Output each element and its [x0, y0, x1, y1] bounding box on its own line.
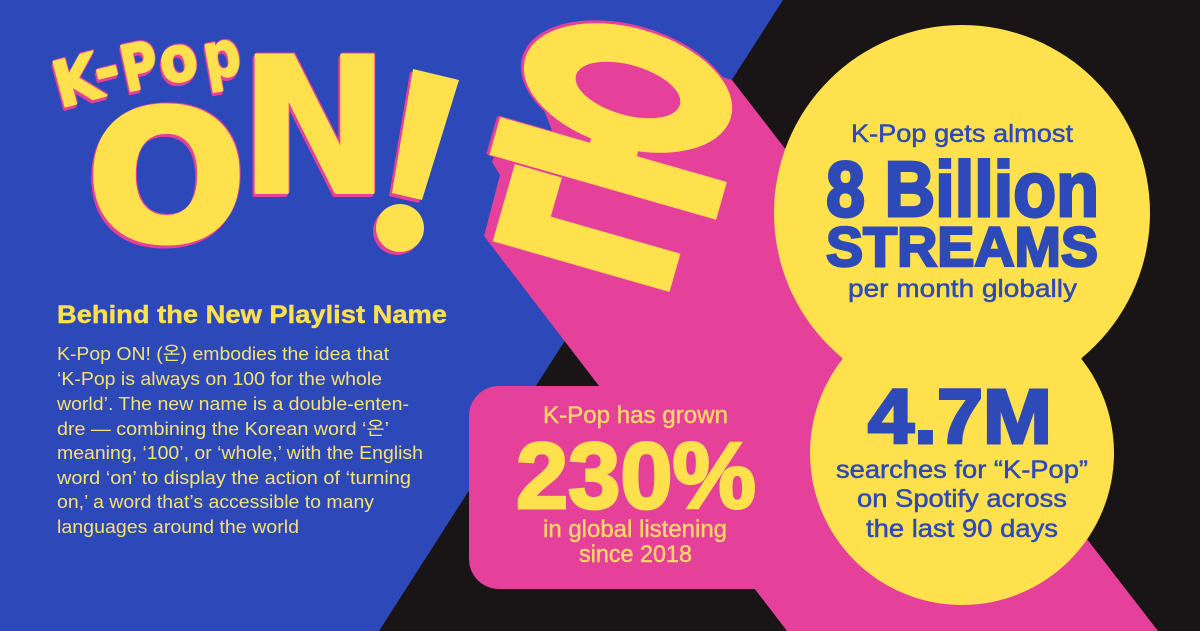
stat: 4.7M searches [836, 374, 1088, 543]
title word K-Pop: - [86, 33, 127, 107]
stat: 230%: 230% [516, 423, 756, 528]
title letter O: O [87, 74, 246, 283]
stat: 4.7M searches: searches for “K-Pop” [836, 456, 1088, 484]
stat: 4.7M searches: on Spotify across [857, 485, 1067, 513]
body copy: world’. The new name is a double-enten- [56, 393, 409, 414]
body copy: word ‘on’ to display the action of ‘turning [56, 467, 411, 488]
stat: 8 billion streams: STREAMS [826, 215, 1098, 278]
title exclamation mark [373, 69, 459, 255]
pink stat panel [469, 386, 889, 589]
stat: K-Pop has grown: K-Pop has grown [543, 402, 728, 429]
title letter N: N [239, 17, 390, 238]
title word K-Pop: o [153, 20, 203, 99]
black diagonal background [379, 0, 1200, 631]
stat: since 2018: since 2018 [579, 541, 692, 568]
title: K-Pop ON! [51, 38, 459, 255]
stat: 4.7M searches: the last 90 days [866, 515, 1058, 543]
stat: 4.7M searches: 4.7M [868, 374, 1052, 460]
stat: 8 billion streams: K-Pop gets almost [851, 120, 1073, 148]
title word K-Pop [45, 17, 246, 123]
body copy: dre — combining the Korean word ‘온’ [57, 418, 389, 439]
body copy: meaning, ‘100’, or ‘whole,’ with the English [57, 442, 423, 463]
stat: 8 billion streams: 8 Billion [826, 145, 1099, 233]
title word K-Pop: P [114, 28, 165, 107]
title word K-Pop: K [45, 40, 111, 123]
body copy: K-Pop ON! (온) embodies the idea that [57, 343, 389, 364]
title word K-Pop: p [197, 17, 246, 95]
stat: in global listening: in global listening [543, 516, 727, 543]
body copy: ‘K-Pop is always on 100 for the whole [57, 368, 382, 389]
text block: playlist name [56, 301, 447, 537]
pink extruded shadow band [484, 60, 1158, 631]
stat: 8 billion streams: per month globally [848, 275, 1078, 303]
body copy [56, 343, 423, 537]
body copy: on,’ a word that’s accessible to many [57, 491, 375, 512]
body copy: languages around the world [57, 516, 299, 537]
yellow circles [774, 25, 1150, 605]
stat: 8 billion streams [826, 120, 1099, 303]
heading: Behind the New Playlist Name [57, 301, 447, 329]
